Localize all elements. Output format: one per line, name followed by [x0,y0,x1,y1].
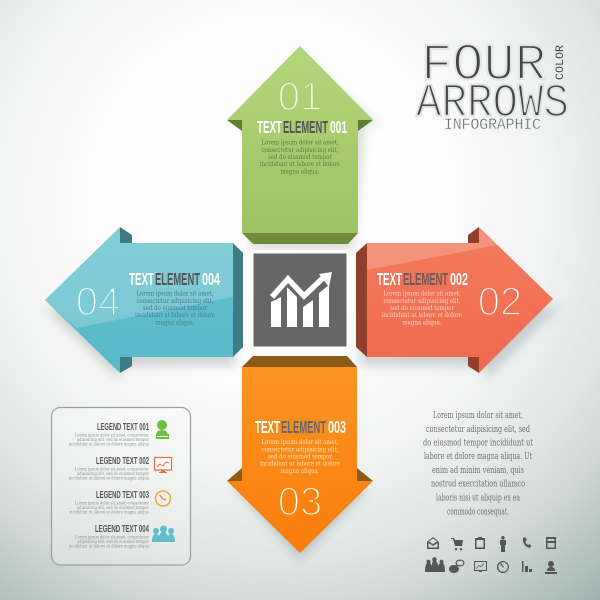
icon: group of people [152,526,175,542]
icon: person [500,536,506,552]
arrow: red 02: ELEMENT [403,269,448,289]
arrow: blue 04 [45,227,243,380]
icon: person at desk [545,561,557,574]
arrow: green 01: sed do eiusmod tempor [268,154,332,161]
legend panel [52,408,190,565]
body text: laboris nisi ut aliquip ex ea [436,494,520,504]
legend item 4: incididunt ut labore et dolore magna aliqua [69,544,149,550]
arrow: red 02: 002 [450,269,468,289]
icon: people [425,557,445,572]
arrow: blue 04: ELEMENT [155,269,200,289]
title [416,36,569,134]
arrow: green 01: consectetur adipisicing elit, [262,147,339,154]
legend item 2: Lorem ipsum dolor sit amet, consectetur [75,468,150,472]
legend item 1: adipisicing elit, sed do eiusmod tempor [77,438,150,443]
legend item 4: adipisicing elit, sed do eiusmod tempor [77,540,150,545]
arrow: green 01: 001 [330,117,347,137]
icon: clock [497,561,509,573]
legend item 2: LEGEND TEXT 002 [96,455,149,467]
arrow: blue 04: 004 [202,269,220,289]
arrow: red 02: 02 [478,280,522,324]
arrow: red 02: incididunt ut labore et dolore [382,312,462,319]
legend item 1: Lorem ipsum dolor sit amet, consectetur [75,434,150,438]
body text: commodo consequat. [447,508,509,518]
title: INFOGRAPHIC [444,116,541,134]
legend item 4: Lorem ipsum dolor sit amet, consectetur [75,536,150,540]
arrow: orange 03: ELEMENT [281,417,326,437]
arrow: orange 03: Lorem ipsum dolor sit amet, [262,439,339,446]
icon: clock [156,491,170,506]
legend item 1 [69,421,150,448]
arrow: green 01: incididunt ut labore et dolore [260,161,340,168]
legend item 4: LEGEND TEXT 004 [95,523,149,535]
icon: rising bar chart [271,272,332,327]
arrow: blue 04: sed do eiusmod tempor [143,305,207,312]
arrow: red 02: sed do eiusmod tempor [390,305,454,312]
arrow: blue 04: magna aliqua. [156,320,195,326]
arrow: orange 03: 03 [278,480,322,524]
arrow: green 01: TEXT [257,117,282,137]
body text: do eiusmod tempor incididunt ut [423,438,533,448]
arrow: blue 04: TEXT [129,269,154,289]
arrow: green 01: 01 [278,75,322,119]
icon: person at desk [156,420,169,439]
arrow: orange 03: consectetur adipisicing elit, [262,446,339,454]
legend item 3: LEGEND TEXT 003 [96,489,149,501]
icon: monitor chart [474,561,487,572]
arrow: orange 03: 003 [328,417,346,437]
arrow: green 01: ELEMENT [283,117,328,137]
arrow: green 01: magna aliqua. [280,168,320,176]
arrow: red 02: Lorem ipsum dolor sit amet, [384,290,461,298]
legend item 3: Lorem ipsum dolor sit amet, consectetur [75,502,150,506]
arrow: orange 03: sed do eiusmod tempor [268,454,332,460]
body text: enim ad minim veniam, quis [432,466,524,476]
arrow: blue 04: Lorem ipsum dolor sit amet, [136,290,214,298]
center chart tile [250,250,349,349]
legend item 3: adipisicing elit, sed do eiusmod tempor [77,506,150,511]
icon: monitor chart [154,458,172,473]
legend item 3: incididunt ut labore et dolore magna aliqua [69,510,149,516]
icon: phone [523,537,532,548]
body text: consectetur adipisicing elit, sed [426,425,530,435]
icon: envelope [427,537,439,549]
arrow: red 02: magna aliqua. [402,320,442,326]
icon: calculator [546,537,556,549]
legend item 1: LEGEND TEXT 001 [97,421,149,433]
body text: labore et dolore magna aliqua. Ut [424,452,532,462]
arrow: green 01: Lorem ipsum dolor sit amet, [262,140,339,146]
legend item 2 [69,455,150,482]
legend item 2: adipisicing elit, sed do eiusmod tempor [77,472,150,477]
arrow: orange 03: TEXT [255,417,280,437]
arrow: green 01 [227,46,380,250]
arrow: blue 04: consectetur adipisicing elit, [136,298,214,305]
icon: cart [451,538,463,550]
icon: clipboard [475,537,485,549]
icon: speech bubbles [449,560,464,573]
body text: Lorem ipsum dolor sit amet, [433,411,523,421]
icon: bars [522,561,532,572]
arrow: orange 03 [227,356,373,560]
legend item 4 [69,523,150,550]
body text [423,411,533,518]
body text: nostrud exercitation ullamco [431,480,525,490]
arrow: orange 03: incididunt ut labore et dolore [260,460,340,468]
arrow: red 02: TEXT [377,269,402,289]
legend item 3 [69,489,150,516]
title: FOUR [421,36,546,95]
icon row: bottom right [425,536,557,574]
title: ARROWS [416,78,569,131]
arrow: orange 03: magna aliqua. [280,468,320,475]
arrow: red 02 [356,227,560,380]
arrow: blue 04: incididunt ut labore et dolore [135,312,215,319]
arrow: red 02: consectetur adipisicing elit, [384,298,461,305]
title: COLOR [555,45,567,80]
legend item 1: incididunt ut labore et dolore magna aliqua [69,442,149,448]
legend item 2: incididunt ut labore et dolore magna aliqua [69,476,149,482]
arrow: blue 04: 04 [76,280,120,324]
